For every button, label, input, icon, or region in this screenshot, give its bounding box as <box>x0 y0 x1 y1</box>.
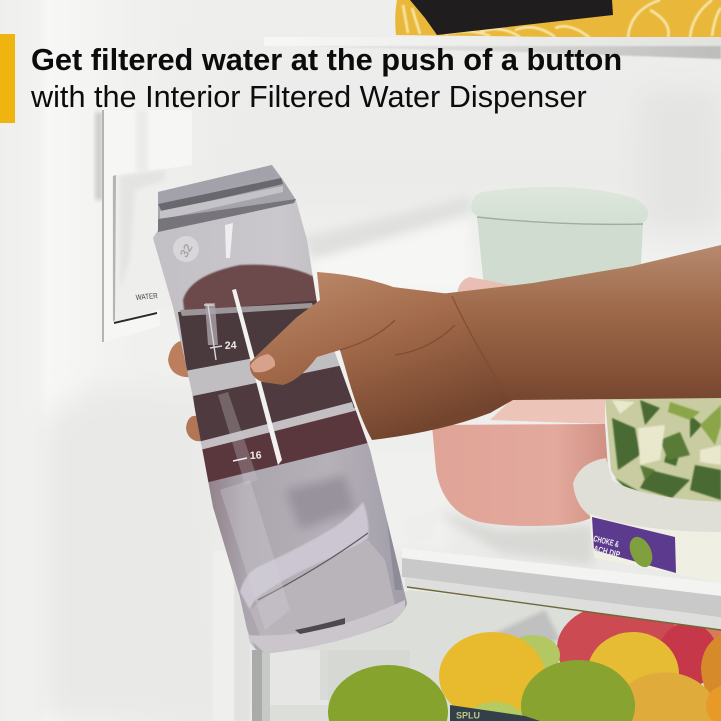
bottle neck and threads <box>158 165 296 232</box>
container: pink bowl <box>432 277 610 526</box>
bottle measurement labels: 16 <box>250 449 262 462</box>
lower section <box>205 442 410 660</box>
hand front <box>250 272 510 440</box>
produce drawer fruit: SPLU <box>456 710 480 720</box>
left fridge shelf trim <box>213 551 252 721</box>
accent bar <box>0 34 15 123</box>
heading: Get filtered water at the push of a button <box>31 42 622 77</box>
container: green lidded tub <box>471 187 648 290</box>
drawer interior <box>252 590 721 721</box>
swoosh <box>240 502 368 610</box>
upper shelf with yellow package <box>264 0 721 59</box>
light stripe <box>198 402 355 452</box>
hand seen through bottle <box>182 264 317 310</box>
product label: ACH DIP <box>593 543 621 560</box>
dark band upper <box>178 300 317 372</box>
produce drawer fruit <box>328 603 721 721</box>
bottle measurement labels <box>204 305 262 462</box>
dispenser label: WATER <box>135 291 159 302</box>
vertical reflections <box>232 289 282 465</box>
water bottle <box>153 165 410 660</box>
bottle measurement labels: 24 <box>225 339 237 352</box>
container: artichoke dip <box>573 458 721 583</box>
container: diced vegetables <box>605 398 721 502</box>
heading <box>31 42 622 114</box>
heading: with the Interior Filtered Water Dispenser <box>31 80 587 114</box>
light band <box>187 352 340 388</box>
forearm <box>440 245 721 420</box>
bottle capacity emblem <box>173 236 199 262</box>
middle refrigerator shelf <box>402 548 721 630</box>
product label: CHOKE & <box>593 533 620 549</box>
dispenser housing <box>95 110 192 342</box>
dark band middle <box>193 366 355 444</box>
product label <box>592 517 676 573</box>
hand fingers behind bottle <box>168 340 212 442</box>
bottle capacity emblem: 32 <box>177 241 196 260</box>
maroon band <box>200 410 372 484</box>
